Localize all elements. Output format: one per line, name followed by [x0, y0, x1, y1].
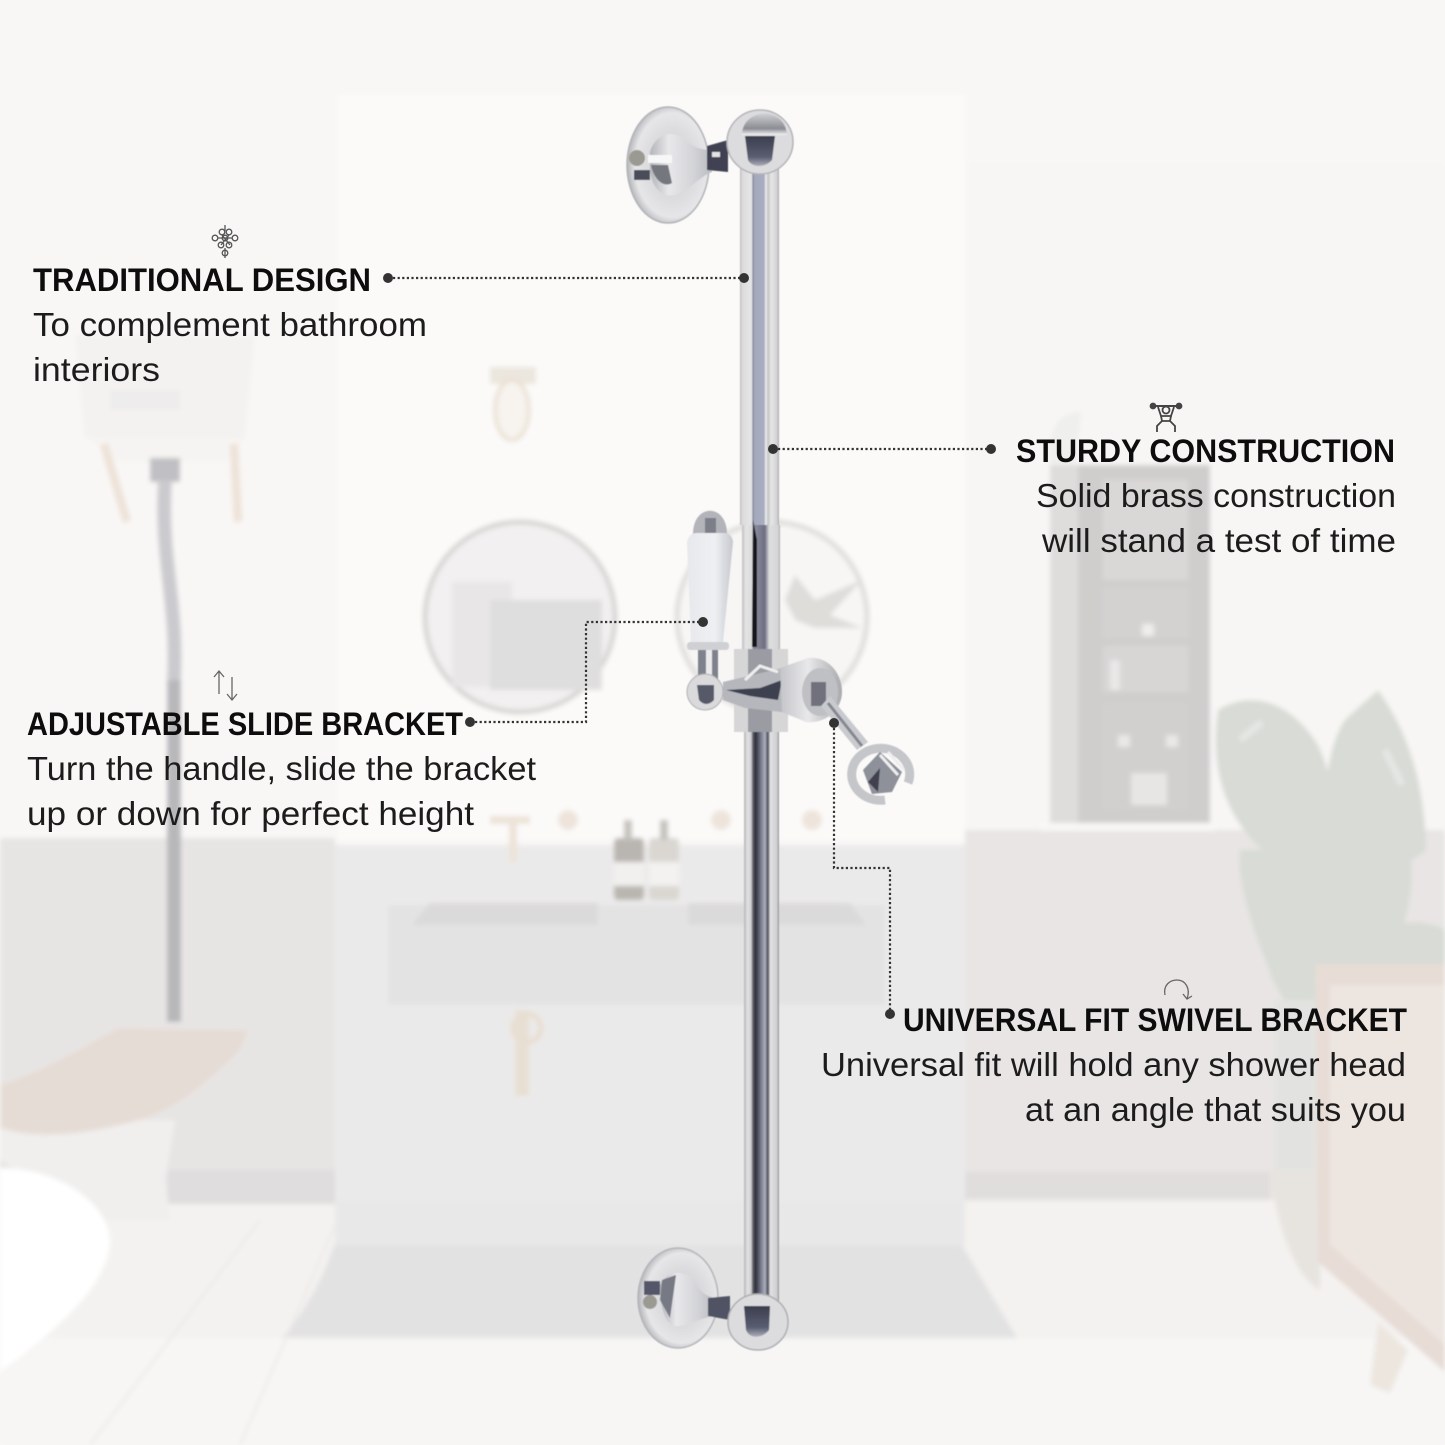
- leader line: [829, 718, 895, 1019]
- body text: Turn the handle, slide the bracket: [27, 750, 536, 787]
- leader line: [465, 617, 708, 727]
- cistern: [75, 335, 255, 1022]
- callout: sturdy construction: [768, 404, 1396, 559]
- heading: TRADITIONAL DESIGN: [33, 262, 371, 298]
- icon: weightlifter: [1150, 404, 1182, 432]
- leader line: [768, 444, 996, 454]
- body text: [821, 1046, 1406, 1128]
- callout: adjustable slide bracket: [27, 617, 708, 832]
- body text: To complement bathroom: [33, 306, 427, 343]
- dark window with shelves: [1040, 412, 1215, 831]
- bottom wall mount: [638, 1248, 788, 1350]
- body text: will stand a test of time: [1041, 522, 1396, 559]
- icon: swivel arrow: [1165, 980, 1192, 999]
- leader line: [383, 273, 749, 283]
- heading: ADJUSTABLE SLIDE BRACKET: [27, 706, 463, 742]
- body text: [27, 750, 536, 832]
- round mirrors: [425, 522, 867, 712]
- callout: traditional design: [33, 225, 749, 388]
- taps and bottles: [490, 810, 822, 1096]
- body text: Solid brass construction: [1036, 477, 1396, 514]
- body text: interiors: [33, 351, 160, 388]
- body text: Universal fit will hold any shower head: [821, 1046, 1406, 1083]
- plant: [1216, 690, 1445, 1290]
- wood cabinet: [1315, 964, 1445, 1393]
- body text: [1036, 477, 1396, 559]
- slide bracket with china handle: [687, 511, 910, 800]
- swivel arm and holder: [821, 696, 910, 800]
- body text: [33, 306, 427, 388]
- heading: STURDY CONSTRUCTION: [1016, 433, 1395, 469]
- product: shower slide rail: [627, 107, 910, 1350]
- body text: at an angle that suits you: [1025, 1091, 1406, 1128]
- icon: up and down arrows: [214, 671, 237, 700]
- toilet and bath: [0, 1028, 248, 1372]
- heading: UNIVERSAL FIT SWIVEL BRACKET: [903, 1002, 1407, 1038]
- callout: universal fit swivel bracket: [821, 718, 1407, 1128]
- rail tube: [740, 165, 780, 1310]
- wall lamp: [490, 367, 536, 440]
- top wall mount: [627, 107, 793, 223]
- icon: knot: [212, 225, 238, 258]
- body text: up or down for perfect height: [27, 795, 474, 832]
